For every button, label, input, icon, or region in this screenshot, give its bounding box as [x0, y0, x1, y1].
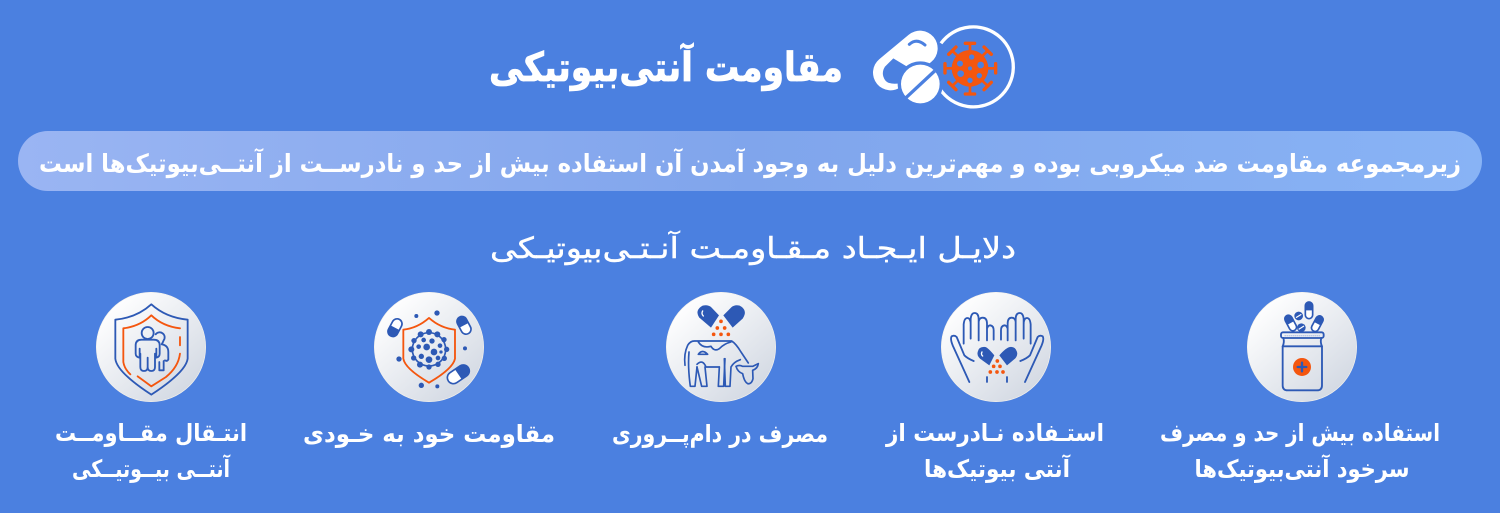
icon: shield with microbe — [374, 292, 484, 402]
item: transmission — [55, 292, 247, 483]
item: self resistance — [303, 292, 555, 448]
item: livestock — [612, 292, 828, 448]
label — [55, 419, 247, 483]
capsule halves — [977, 347, 1017, 365]
label — [885, 419, 1104, 483]
capsule left — [1284, 314, 1298, 332]
label — [1160, 419, 1440, 483]
section heading: دلایـل ایـجـاد مـقـاومـت آنـتـی‌بیوتیـکی — [490, 230, 1016, 265]
icon: pills and virus — [883, 27, 1013, 107]
label: انتـقال مقــاومــت — [55, 419, 247, 447]
label: سرخود آنتی‌بیوتیک‌ها — [1194, 454, 1410, 483]
icon: cow with capsule — [666, 292, 776, 402]
label: مصرف در دام‌پــروری — [612, 420, 828, 448]
label: آنتی بیوتیک‌ها — [924, 454, 1071, 483]
capsule top-right — [455, 315, 473, 336]
falling dots — [988, 359, 1005, 374]
icon: hands with capsule — [941, 292, 1051, 402]
title: مقاومت آنتی‌بیوتیکی — [489, 42, 843, 91]
item: misuse — [885, 292, 1104, 483]
icon: shield with people — [96, 292, 206, 402]
capsule bottom-right — [445, 363, 472, 386]
icon: virus — [945, 43, 996, 94]
item: overuse — [1160, 292, 1440, 483]
icon: pill bottle — [1247, 292, 1357, 402]
label: استفاده بیش از حد و مصرف — [1160, 419, 1440, 447]
capsule upright — [1305, 302, 1313, 319]
label: آنتــی بیــوتیــکی — [72, 454, 231, 483]
capsule right — [1310, 315, 1324, 333]
label: مقاومت خود به خـودی — [303, 420, 555, 448]
label: استـفاده نـادرست از — [885, 419, 1104, 447]
subtitle banner — [18, 131, 1482, 191]
capsule top-left — [386, 317, 404, 338]
